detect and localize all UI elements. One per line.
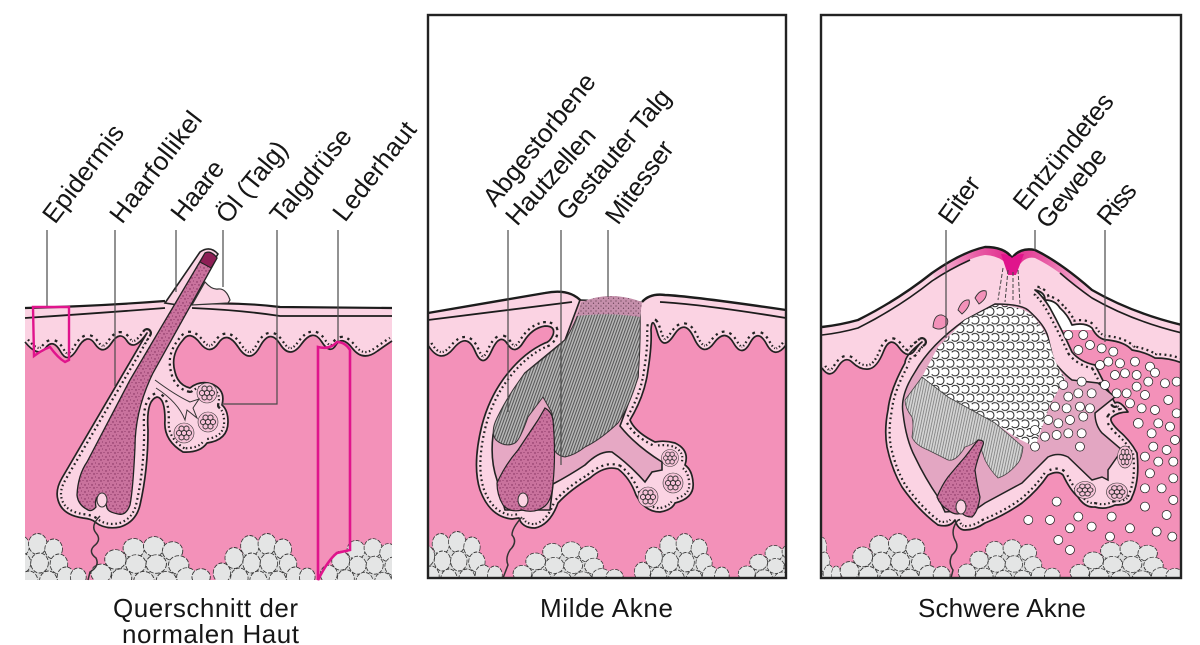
blackhead tip: [577, 296, 642, 317]
panel: normal skin cross-section: [0, 105, 423, 645]
labels: severe acne: [932, 87, 1143, 234]
fat tissue clusters: [822, 533, 1180, 577]
leader lines: [508, 230, 608, 465]
sebaceous gland: [1074, 446, 1132, 501]
labels: mild acne: Abgestorbene: [476, 67, 602, 212]
panel: mild acne: [426, 14, 788, 618]
skin surface lines: [822, 247, 1182, 335]
caption: severe acne: Schwere Akne: [918, 593, 1086, 623]
epidermis and follicle wall: [822, 247, 1182, 530]
nerve: [503, 517, 522, 578]
scattered pus cells in ruptured tissue: [1024, 330, 1181, 554]
epidermis and follicle wall: [428, 292, 786, 528]
labels: normal skin: Epidermis: [36, 118, 130, 229]
skin surface lines: [25, 301, 392, 318]
blackhead plug of dead cells: [493, 303, 640, 457]
fat tissue clusters: [429, 531, 785, 577]
labels: severe acne: Eiter: [932, 170, 987, 230]
papilla: [97, 493, 107, 507]
dermis layer: [821, 330, 1181, 578]
labels: severe acne: Entzündetes: [1006, 87, 1120, 216]
labels: normal skin: Lederhaut: [326, 115, 423, 227]
papilla: [518, 493, 528, 507]
oil on skin surface: [192, 282, 230, 305]
hair tip: [200, 252, 217, 268]
highlight: dermis box: [318, 342, 350, 580]
caption: normal skin: [113, 593, 300, 645]
labels: severe acne: Gewebe: [1029, 141, 1113, 234]
dermis layer: [428, 320, 786, 578]
pore: [1001, 254, 1024, 275]
nerve: [88, 516, 100, 580]
papilla: [956, 500, 966, 514]
pus channel: [998, 268, 1020, 304]
frame: [428, 15, 786, 578]
leader lines: [946, 230, 1105, 342]
caption: normal skin: Querschnitt der: [113, 593, 298, 623]
labels: normal skin: [36, 105, 423, 229]
sebaceous gland: [155, 380, 218, 443]
labels: severe acne: Riss: [1090, 176, 1143, 231]
frame: [821, 15, 1181, 578]
hair bulb: [937, 440, 983, 517]
inflamed surface band: [932, 247, 1092, 297]
hair and bulb: [77, 252, 217, 514]
follicle cavity: [902, 304, 1122, 512]
sebaceous gland: [638, 450, 683, 507]
panel: severe acne: [820, 14, 1182, 618]
labels: mild acne: Hautzellen: [499, 120, 602, 231]
labels: normal skin: Talgdrüse: [263, 122, 358, 229]
labels: normal skin: Öl (Talg): [209, 135, 294, 229]
epidermis and follicle wall: [25, 301, 392, 528]
labels: mild acne: Gestauter Talg: [550, 82, 677, 226]
highlight: epidermis box: [33, 307, 69, 362]
trapped dead cells: [905, 377, 1023, 478]
hair bulb: [497, 408, 554, 511]
labels: normal skin: Haarfollikel: [103, 105, 208, 229]
hair sheath: [165, 249, 218, 306]
fat tissue clusters: [25, 533, 392, 580]
dermis layer: [25, 320, 392, 580]
dermis pockets: [933, 291, 986, 329]
pus mass: [922, 305, 1065, 447]
labels: mild acne: Mitesser: [599, 134, 680, 230]
caption: mild acne: Milde Akne: [540, 593, 673, 623]
nerve: [950, 520, 958, 578]
labels: normal skin: Haare: [164, 154, 230, 227]
skin surface lines: [428, 292, 786, 320]
labels: mild acne: [476, 67, 680, 231]
leader lines: [47, 230, 338, 404]
follicle cavity: [492, 300, 662, 510]
